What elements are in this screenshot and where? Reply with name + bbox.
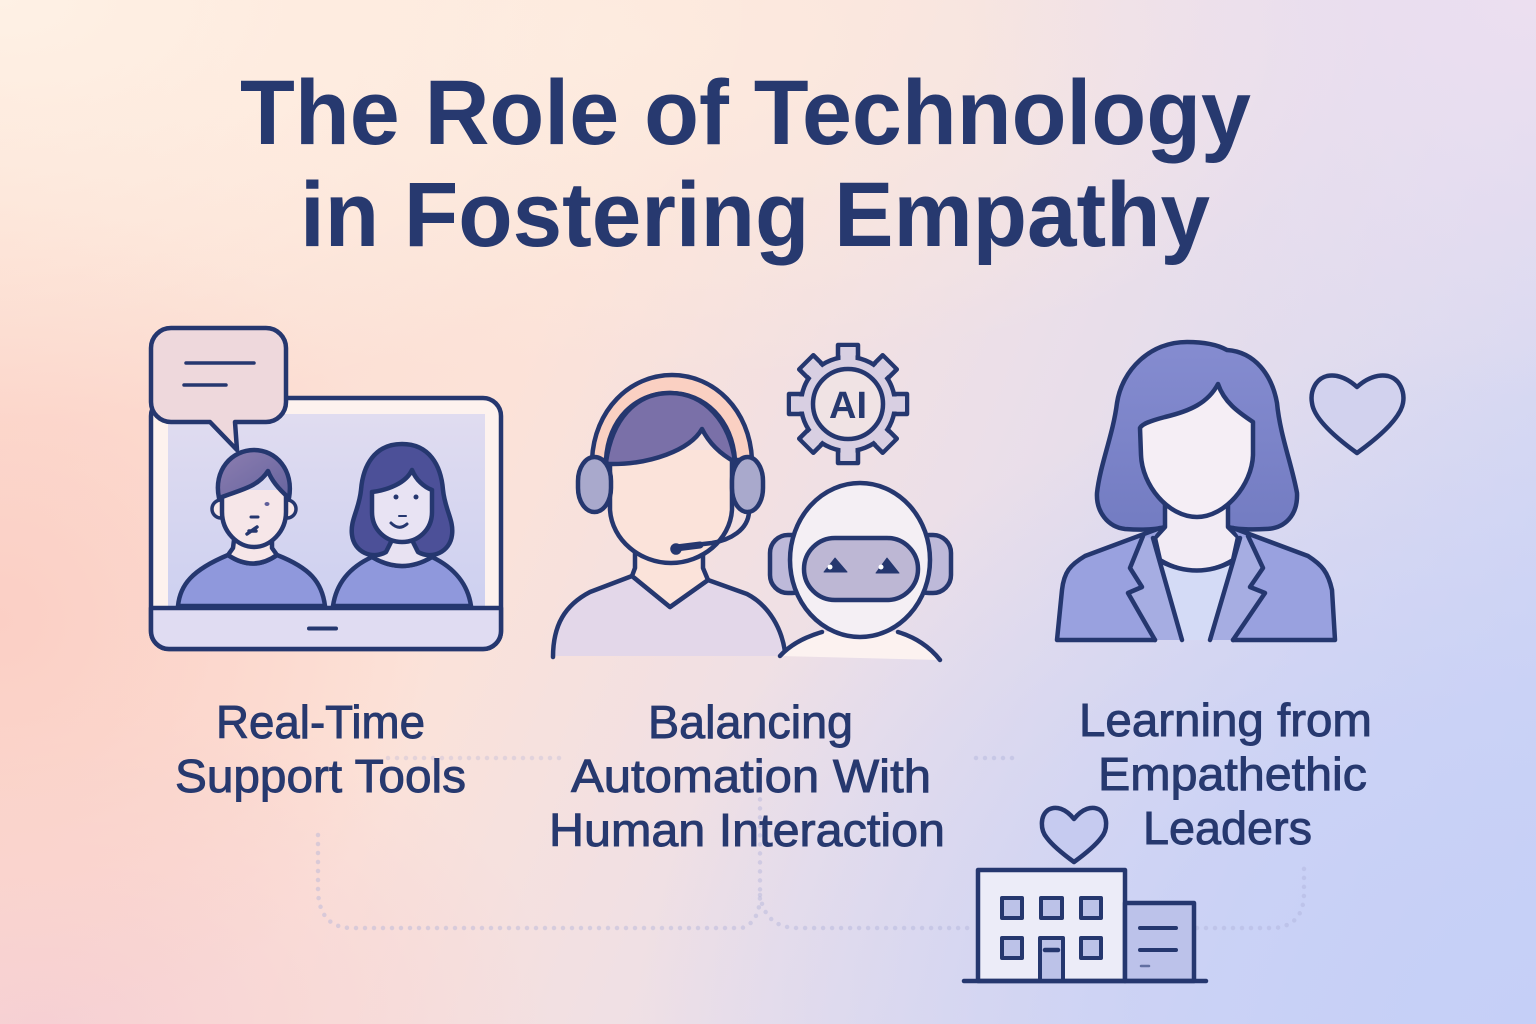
agent face [610, 450, 732, 563]
robot head [790, 483, 930, 637]
title [240, 62, 1251, 266]
monitor frame [151, 398, 501, 649]
label: learning from empathethic leaders: Empathethic [1098, 748, 1367, 800]
title: The Role of Technology [240, 62, 1251, 164]
neck [1155, 505, 1238, 571]
headband [592, 375, 752, 460]
heart above building [1042, 808, 1106, 862]
robot body [780, 632, 940, 660]
microphone boom [677, 512, 749, 547]
label: balancing automation with human interaction: Balancing [648, 696, 853, 748]
windows [1002, 898, 1101, 981]
main block [978, 870, 1125, 981]
agent hair [606, 393, 735, 464]
icon: building with heart [964, 808, 1206, 981]
woman on call [333, 444, 471, 606]
agent shoulders [553, 576, 785, 656]
man on call [178, 450, 325, 606]
earcups [578, 457, 611, 512]
icon: heart [1312, 375, 1403, 453]
label: real-time support tools: Support Tools [175, 750, 466, 802]
speech bubble [151, 328, 286, 450]
label: real-time support tools: Real-Time [216, 696, 425, 748]
label: real-time support tools [175, 696, 466, 802]
monitor screen [168, 414, 485, 608]
ground line [964, 979, 1206, 983]
label: balancing automation with human interaction: Human Interaction [549, 804, 945, 856]
icon: support agent with headset [553, 345, 951, 660]
jacket left [1057, 528, 1182, 640]
label: balancing automation with human interaction [549, 696, 945, 856]
face [1140, 384, 1253, 517]
robot ears [770, 535, 810, 593]
hair [1097, 342, 1297, 530]
label: learning from empathethic leaders: Learning from [1079, 694, 1372, 746]
label: balancing automation with human interaction: Automation With [571, 750, 931, 802]
label: learning from empathethic leaders: Leaders [1143, 802, 1312, 854]
robot visor [804, 538, 918, 600]
icon: empathetic woman leader [1057, 342, 1403, 640]
dotted connector lines [318, 758, 1304, 928]
annex block [1125, 903, 1194, 981]
label: learning from empathethic leaders [1079, 694, 1372, 854]
monitor base bar [151, 608, 501, 649]
blouse [1160, 561, 1233, 640]
jacket right [1210, 528, 1335, 640]
icon: AI gear: AI [829, 385, 867, 427]
title: in Fostering Empathy [300, 164, 1210, 266]
icon: video call on monitor [151, 328, 501, 649]
icon: AI gear [789, 345, 907, 463]
